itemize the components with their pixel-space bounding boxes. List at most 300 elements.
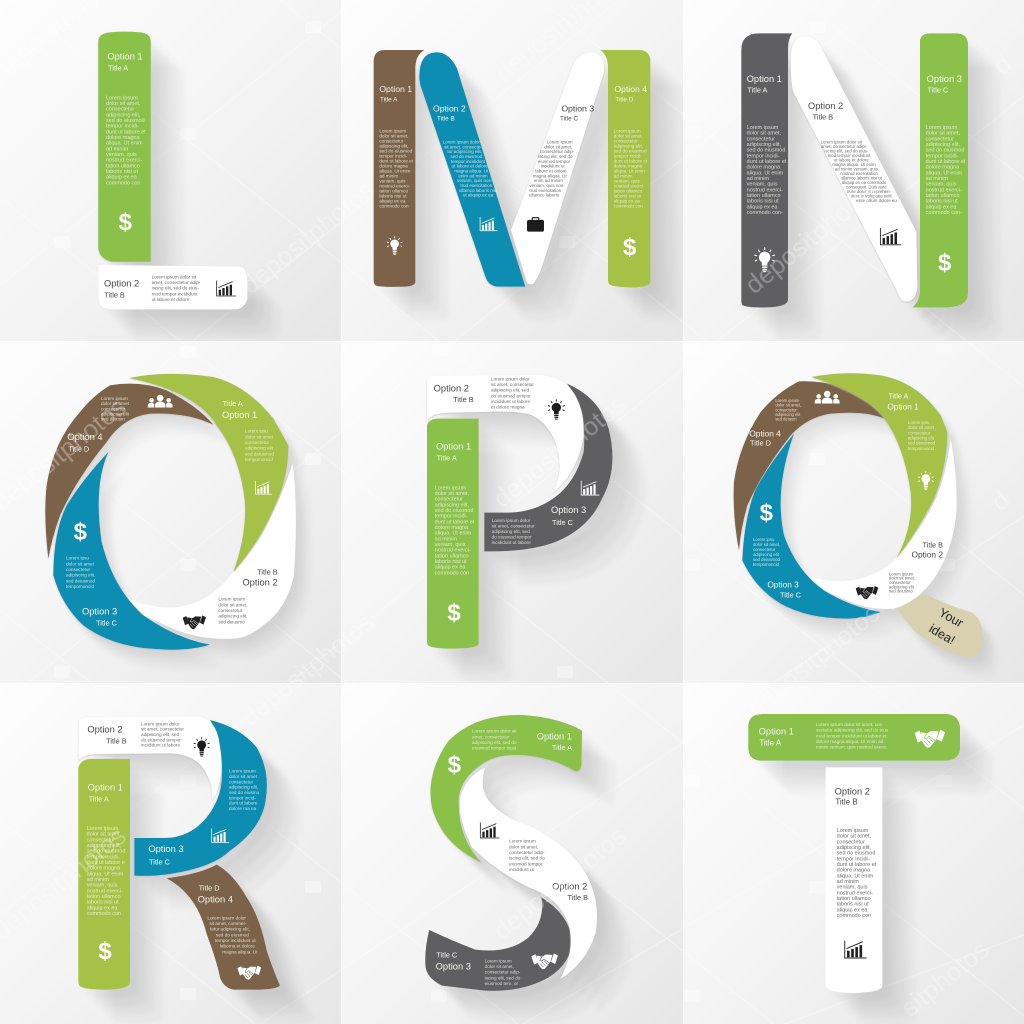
heading: option 3: Option 3: [551, 505, 586, 515]
icon: light bulb: [194, 737, 210, 757]
heading: option 1: Option 1: [747, 74, 782, 84]
subheading: title D: Title D: [615, 96, 634, 103]
body text: Lorem ipsum dolor sit: [152, 274, 197, 279]
ribbon: option 1 green: [748, 714, 960, 761]
icon: chart: [256, 481, 272, 494]
body text: aliqua. Ut enim: [747, 170, 784, 176]
body text: Lorem ipsum dolor: [443, 139, 480, 144]
body text: labore et dolore: [535, 168, 567, 173]
heading: option 2: Option 2: [552, 881, 587, 891]
body text: consectetur: [926, 136, 954, 142]
body text: tempomoncid: [245, 457, 273, 462]
subheading: title C: Title C: [927, 86, 949, 95]
icon: light bulb: [387, 236, 402, 255]
body text: mod tempor incididunt ut labore et: [816, 733, 887, 738]
body text: dunt ut labore et: [106, 129, 146, 135]
body text: tation ullamco: [837, 896, 871, 902]
body text: adipiscing elit: [775, 412, 801, 417]
body text: Lorem ipsum: [614, 128, 641, 133]
heading: option 1: Option 1: [759, 727, 794, 737]
body text: consectetur: [837, 839, 865, 845]
heading: option 1: Option 1: [537, 731, 572, 741]
body text: dolor sit amet,: [544, 144, 572, 149]
heading: option 3: Option 3: [82, 606, 117, 616]
tail: your idea: [897, 594, 983, 657]
subheading: title C: Title C: [436, 951, 458, 960]
body text: ullamco laboris nisi ut: [841, 175, 883, 180]
body text: commodo con: [614, 203, 643, 208]
body text: ad minim: [435, 536, 457, 542]
body text: dolor sit amet,: [509, 844, 538, 849]
body text: adipiscing elit,: [218, 614, 248, 619]
body text: sed deiusm: [101, 417, 125, 422]
body text: aliquip ex ea: [926, 204, 957, 210]
body text: ad minim: [87, 877, 109, 883]
ribbon: option 2 white: [427, 375, 584, 494]
body text: adipiscing elit, sed: [491, 388, 529, 393]
heading: option 2: Option 2: [912, 549, 943, 559]
subheading: title C: Title C: [96, 619, 118, 628]
body text: tempor incid-: [229, 795, 256, 800]
body text: adipiscing elit,: [926, 142, 961, 148]
subheading: title A: Title A: [759, 738, 782, 747]
body text: adipiscing elit,: [379, 143, 409, 148]
body text: adipiscing elit, sed: [141, 732, 179, 737]
body text: amet, consectetur: [472, 734, 509, 739]
body text: Lorem ipsu: [908, 420, 929, 425]
body text: veniam, quis: [926, 182, 957, 188]
body text: dunt ut labore et: [435, 519, 475, 525]
body text: tempor incidi-: [106, 124, 139, 130]
subheading: title B: Title B: [813, 112, 833, 121]
body text: sit amet, consectetur: [141, 727, 184, 732]
body text: tempor incidi-: [747, 153, 780, 159]
watermark text: depositphotos: [235, 606, 380, 732]
body text: tation ullamco: [747, 193, 781, 199]
ribbon: option 3 blue: [134, 720, 267, 876]
body text: dunt ut labore et: [926, 159, 966, 165]
body text: adipiscing elit, sed: [492, 529, 530, 534]
body text: consectetur: [101, 406, 126, 411]
body text: ut labore et dolore: [152, 297, 190, 302]
body text: consectetur: [379, 138, 404, 143]
body text: adipiscing elit: [889, 584, 915, 589]
body text: Lorem ipsu: [753, 537, 774, 542]
body text: adipiscing elit,: [66, 573, 95, 578]
body text: aliquip ex ea commodo: [842, 180, 887, 185]
body text: commodo con-: [926, 210, 962, 216]
letter O: [45, 374, 311, 670]
heading: option 4: Option 4: [614, 84, 647, 94]
body text: Lorem ipsum: [889, 571, 913, 576]
body text: dolor sit amet,: [106, 101, 141, 107]
body text: dunt ut labore: [229, 801, 258, 806]
watermark text: sitphotos: [895, 934, 995, 1023]
subheading: title D: Title D: [68, 444, 89, 453]
body text: Lorem ipsum dolor: [141, 721, 180, 726]
body text: dolore magna: [837, 868, 871, 874]
body text: nostrud exerci-: [379, 183, 411, 188]
body text: dolore magna: [747, 165, 781, 171]
icon: dollar: $: [448, 751, 461, 778]
body text: sed do eiusmod: [837, 851, 875, 857]
body text: tation ullamco: [106, 163, 140, 169]
heading: option 2: Option 2: [434, 383, 469, 393]
body text: adipiscing elit,: [87, 843, 122, 849]
heading: option 1: Option 1: [222, 410, 257, 420]
body text: commodo con: [87, 911, 121, 917]
body text: aliquip ex ea: [614, 198, 640, 203]
letter N: [741, 33, 1001, 341]
body text: amet, consectetur adip-: [152, 280, 201, 285]
body text: commodo con-: [747, 210, 783, 216]
body text: dunt ut labore et: [747, 159, 787, 165]
watermark text: depositphotos: [487, 820, 632, 946]
ribbon: option 1 green: [78, 759, 130, 990]
body text: aliquip ex ea: [435, 565, 466, 571]
subheading: title B: Title B: [104, 290, 125, 299]
letter S: [425, 715, 630, 1024]
body text: dolor sit amet,: [485, 964, 514, 969]
body text: aliquip ex ea: [87, 905, 118, 911]
ribbon: option 1 green: [427, 419, 479, 649]
body text: et dolore magna: [491, 405, 525, 410]
body text: sed do eiusmod: [106, 118, 145, 124]
subheading: title C: Title C: [552, 518, 574, 527]
heading: option 1: Option 1: [379, 84, 412, 94]
icon: handshake: [531, 953, 558, 969]
body text: tempor incidi-: [837, 856, 870, 862]
body text: dolor sit amet,: [379, 133, 409, 138]
body text: enim ad minim: [534, 178, 563, 183]
icon: light bulb: [918, 471, 934, 490]
body text: tempor incididunt ut: [215, 938, 256, 943]
body text: incididunt ut: [541, 164, 565, 169]
subheading: title A: Title A: [89, 794, 109, 803]
body text: nostrud exerci-: [435, 548, 471, 554]
body text: tempor incidi-: [379, 153, 408, 158]
body text: sed do eiusmod: [435, 508, 473, 514]
body text: laboris nisi ut: [614, 193, 642, 198]
body text: nostrud exerci-: [87, 888, 123, 894]
body text: dolor sit amet: [66, 561, 95, 566]
watermark text: depositphotos: [235, 174, 380, 300]
subheading: title A: Title A: [108, 63, 128, 72]
body text: sed deiusmod: [245, 451, 274, 456]
body text: Lorem ipsum: [229, 769, 256, 774]
ribbon: option 3 gray: [425, 897, 573, 991]
body text: sed do eiusmod: [87, 849, 125, 855]
subheading: title A: Title A: [552, 743, 572, 752]
heading: option 3: Option 3: [561, 104, 594, 114]
body text: Lorem ipsum: [218, 597, 245, 602]
body text: tempor incidi-: [926, 153, 959, 159]
icon: chart: [480, 217, 497, 231]
letter R: [78, 716, 313, 1023]
body text: veniam, quis nos-: [457, 178, 493, 183]
body text: tempor incidi-: [435, 514, 468, 520]
body text: nostrud exercitation: [840, 171, 878, 176]
body text: magna aliqua. Ut: [533, 173, 567, 178]
body text: consectetur: [106, 107, 135, 113]
body text: do eiusmod tempor: [491, 393, 531, 398]
body text: dolore magna: [379, 163, 408, 168]
body text: sed deiusmod: [908, 441, 936, 446]
body text: veniam, quis: [106, 152, 137, 158]
body text: adipiscing elit: [753, 552, 780, 557]
body text: dolor sit amet,: [747, 131, 782, 137]
body text: aliqua. Ut enim: [106, 141, 143, 147]
body text: laboris nisi ut: [747, 199, 779, 205]
body text: ad minim: [379, 173, 398, 178]
body text: aliquip ex ea: [747, 204, 778, 210]
icon: dollar: $: [74, 519, 87, 546]
subheading: title C: Title C: [780, 590, 802, 599]
body text: dolor sit amet: [245, 434, 274, 439]
ribbon: option 2 white: [460, 767, 597, 979]
body text: Lorem ipsum: [547, 139, 573, 144]
body text: aliqua. Ut enim: [379, 168, 411, 173]
body text: sectetur adipiscing elit, sed do eius: [816, 728, 889, 733]
body text: Lorem ipsum: [926, 125, 958, 131]
subheading: title B: Title B: [835, 798, 858, 807]
ribbon: option 3 blue: [742, 434, 881, 619]
letter M: [374, 50, 684, 321]
body text: ullamco laboris nisi: [459, 188, 497, 193]
heading: option 2: Option 2: [87, 725, 123, 735]
ribbon: option 3 gray: [484, 384, 612, 551]
body text: adipiscing elit,: [614, 143, 643, 148]
body text: iscing elit, sed do: [485, 975, 521, 980]
ribbon: option 1 green: [812, 373, 947, 558]
body text: sed deiusm: [775, 417, 797, 422]
ribbon: option 4 green: [600, 50, 650, 287]
body text: irure dolor in reprehen-: [847, 189, 892, 194]
body text: laboris nisi ut: [106, 169, 138, 175]
body text: adipiscing elit,: [229, 785, 258, 790]
body text: dolor sit amet,: [753, 542, 780, 547]
ribbon: option 2 white: [826, 767, 882, 993]
body text: nostrud exerci-: [837, 890, 873, 896]
body text: aliqua. Ut enim: [926, 170, 963, 176]
body text: nostrud exerci-: [106, 158, 142, 164]
body text: dolore magna: [106, 135, 140, 141]
body text: sit amet, commer-: [209, 921, 247, 926]
body text: tempor incidi-: [87, 854, 120, 860]
body text: ad minim veniam, quis: [835, 166, 878, 171]
body text: tempomoncid: [66, 584, 94, 589]
heading: option 1: Option 1: [88, 783, 123, 793]
body text: consectetur adip-: [485, 970, 521, 975]
body text: tation ullamco: [435, 553, 469, 559]
subheading: title A: Title A: [747, 86, 768, 95]
body text: eiusmod tempor: [509, 861, 543, 866]
icon: chart: [845, 941, 867, 958]
letter L: [98, 32, 281, 343]
ribbon: option 1 green: [98, 32, 151, 262]
body text: magna aliqua. Ut enim: [832, 162, 876, 167]
body text: aliquip ex ea: [106, 175, 138, 181]
subheading: title A: Title A: [380, 96, 398, 103]
body text: derit in voluptate velit: [851, 193, 892, 198]
subheading: title B: Title B: [257, 567, 278, 576]
body text: sed deiusmo: [889, 589, 913, 594]
body text: laboris nisi ut: [87, 900, 119, 906]
body text: ad minim: [837, 879, 859, 885]
body text: consectetur: [775, 407, 797, 412]
icon: chart: [217, 281, 236, 296]
body text: Lorem ipsum: [837, 828, 869, 834]
body text: Lorem ipsum dolor: [207, 915, 246, 920]
body text: Lorem ipsum: [106, 95, 138, 101]
watermark text: d: [987, 48, 1017, 81]
letter P: [427, 375, 646, 682]
body text: consectetur: [245, 440, 270, 445]
heading: option 1: Option 1: [436, 442, 471, 452]
heading: option 2: Option 2: [242, 578, 278, 588]
ribbon: option 3 blue: [53, 452, 210, 650]
body text: Lorem ipsum: [775, 398, 799, 403]
icon: people: [815, 391, 840, 404]
body text: iscing elit, sed do eius-: [152, 286, 199, 291]
ribbon: option 1 gray: [741, 33, 792, 307]
icon: light bulb: [754, 247, 775, 272]
body text: adipiscing elit,: [837, 845, 872, 851]
ribbon: option 2 white: [78, 716, 221, 799]
icon: dollar: $: [623, 234, 636, 261]
ribbon: option 1 brown: [374, 50, 424, 287]
body text: ad minim: [614, 173, 633, 178]
letter T: [748, 714, 993, 1024]
icon: handshake: [183, 615, 206, 629]
body text: tetur adipiscing elit,: [210, 927, 250, 932]
subheading: title C: Title C: [560, 116, 578, 123]
body text: veniam, quis nos-: [529, 183, 565, 188]
body text: adipiscing elit,: [106, 112, 141, 118]
body text: veniam, quis: [614, 178, 640, 183]
body text: tempor incididunt: [451, 159, 486, 164]
watermark text: depositphotos: [739, 174, 884, 300]
body text: Lorem ipsu: [245, 429, 268, 434]
body text: sed do eiusmod: [216, 932, 249, 937]
body text: dolore magna aliqua. Ut enim ad: [816, 739, 884, 744]
body text: nostrud exerci-: [747, 187, 783, 193]
icon: people: [148, 395, 173, 408]
heading: option 1: Option 1: [887, 401, 919, 411]
ribbon: option 4 brown: [167, 865, 280, 990]
ribbon: option 2 white: [128, 464, 296, 639]
body text: dolore magna: [435, 525, 469, 531]
body text: dolor sit amet,: [837, 834, 872, 840]
body text: tempor incidi-: [614, 153, 642, 158]
body text: dolor sit amet,: [435, 491, 470, 497]
body text: Lorem ipsum: [379, 128, 406, 133]
heading: option 2: Option 2: [104, 279, 139, 289]
body text: sed deiusmod: [753, 557, 781, 562]
body text: dolor sit amet: [101, 401, 130, 406]
heading: option 3: Option 3: [767, 580, 799, 590]
body text: dolor sit amet,: [889, 576, 915, 581]
watermark text: depositphotos: [487, 388, 632, 514]
body text: laboris nisi ut: [435, 559, 467, 565]
icon: dollar: $: [760, 500, 773, 527]
body text: Lorem ipsum dolor sit amet, con: [816, 722, 882, 727]
body text: eiusmod tem. or: [485, 981, 518, 986]
body text: tation ullamco: [926, 193, 960, 199]
body text: Lorem ipsum: [435, 485, 467, 491]
ribbon: option 3 green: [912, 33, 968, 307]
watermark text: d: [985, 484, 1015, 517]
body text: dolor sit amet,: [218, 602, 248, 607]
body text: minim veniam, quis nostrud exerci: [816, 745, 886, 750]
body text: amet, consectetur adipi-: [821, 144, 868, 149]
icon: dollar: $: [447, 599, 461, 626]
body text: Lorem ipsum dolor: [491, 376, 530, 381]
heading: option 4: Option 4: [198, 894, 233, 904]
body text: veniam, quis: [435, 542, 466, 548]
body text: iscing elit, sed do eius-: [824, 148, 869, 153]
body text: incididunt ut labore: [491, 399, 530, 404]
body text: dolor sit amet: [908, 425, 935, 430]
body text: aliqua. Ut enim: [435, 531, 472, 537]
body text: laboris nisi ut: [379, 193, 407, 198]
body text: commodo con: [106, 180, 140, 186]
body text: sed do eiusmod: [926, 148, 964, 154]
body text: magna aliqua. Ut: [454, 168, 489, 173]
body text: consectetur: [889, 580, 911, 585]
body text: aliquip ex ea: [379, 198, 406, 203]
heading: option 4: Option 4: [67, 432, 103, 442]
letter Q: [734, 373, 998, 677]
subheading: title A: Title A: [223, 399, 243, 408]
body text: do eiusmod tempor: [141, 737, 181, 742]
subheading: title D: Title D: [199, 883, 220, 892]
body text: Lorem ipsum dolor sit: [472, 729, 517, 734]
ribbon: option 3 white: [511, 52, 604, 284]
body text: adipiscing elit,: [747, 142, 782, 148]
icon: handshake: [915, 730, 945, 748]
body text: tation ullamco: [87, 894, 121, 900]
body text: veniam, quis: [87, 883, 118, 889]
body text: adipiscing elit: [908, 435, 935, 440]
body text: magna aliqua. Ut: [222, 949, 258, 954]
body text: veniam, quis: [379, 178, 406, 183]
body text: nostrud exerci-: [614, 183, 645, 188]
body text: commodo con: [379, 203, 409, 208]
body text: dunt ut labore e: [87, 860, 125, 866]
heading: option 3: Option 3: [148, 844, 184, 854]
subheading: title D: Title D: [750, 438, 771, 447]
body text: sed deiusmod: [66, 578, 95, 583]
body text: incididunt ut labore: [141, 743, 180, 748]
body text: sit amet, consectetur: [492, 523, 535, 528]
body text: consequat. Duis aute: [846, 184, 887, 189]
body text: dolor sit amet,: [775, 403, 801, 408]
body text: Lorem ipsum: [509, 839, 536, 844]
body text: aliqua. Ut enim: [87, 871, 124, 877]
body text: adipiscing elit: [245, 446, 274, 451]
body text: veniam, quis: [747, 182, 778, 188]
body text: dolor sit amet: [229, 774, 258, 779]
body text: aliqua. Ut enim: [614, 168, 645, 173]
body text: adipiscing elit: [101, 411, 130, 416]
body text: Lorem ipsum: [87, 826, 119, 832]
subheading: title B: Title B: [922, 540, 943, 549]
body text: tation ullamco: [614, 188, 643, 193]
body text: Lorem ipsum: [747, 125, 779, 131]
icon: dollar: $: [938, 250, 951, 277]
body text: incididunt ut: [509, 867, 535, 872]
